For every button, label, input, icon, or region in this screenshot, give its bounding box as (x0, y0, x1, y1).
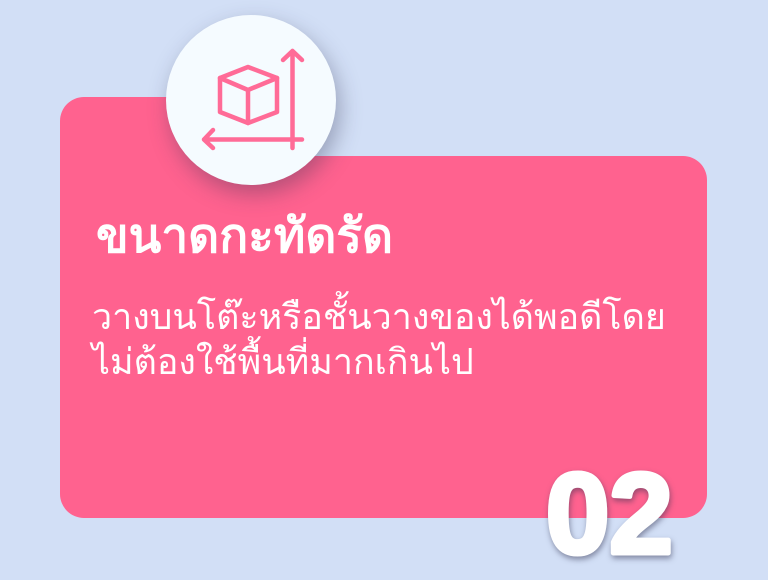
body text: วางบนโต๊ะหรือชั้นวางของได้พอดีโดย (92, 297, 666, 337)
step number: 02 (546, 451, 673, 578)
body text: ไม่ต้องใช้พื้นที่มากเกินไป (92, 342, 474, 382)
heading: ขนาดกะทัดรัด (96, 210, 393, 263)
icon badge: cube with dimension arrows (166, 15, 336, 185)
body text (90, 291, 666, 382)
